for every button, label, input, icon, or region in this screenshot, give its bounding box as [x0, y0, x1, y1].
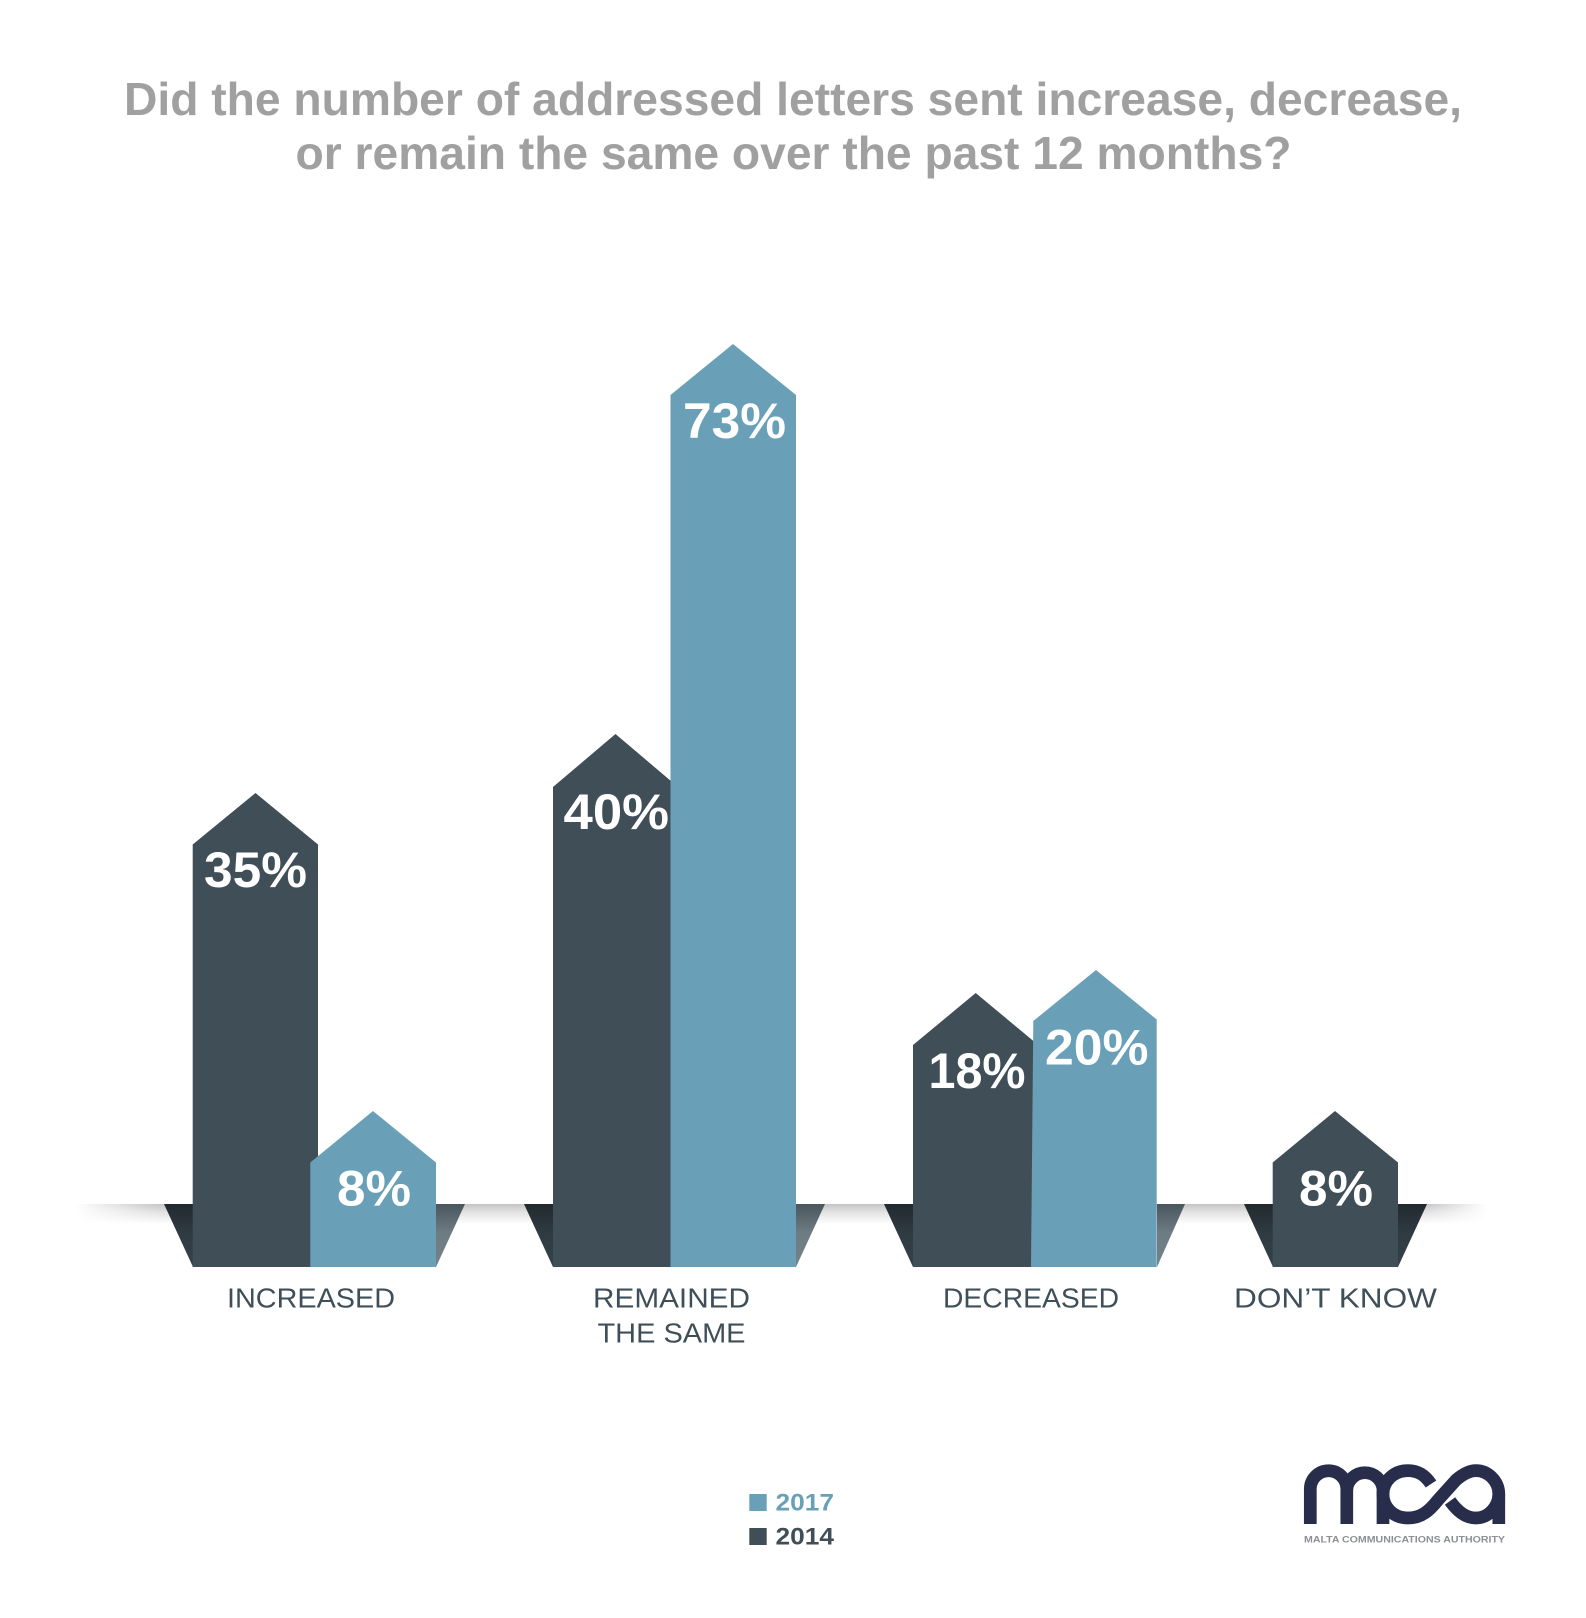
- logo: MCA: [1304, 1471, 1506, 1546]
- right flap: [1398, 1204, 1427, 1267]
- value: 35%: 35%: [204, 842, 307, 898]
- value: 18%: 18%: [928, 1043, 1026, 1099]
- label: remained the same: THE SAME: [598, 1318, 746, 1349]
- legend: [749, 1490, 835, 1551]
- bar group: remained the same: [524, 344, 825, 1349]
- bar: 2017 8%: [310, 1111, 436, 1267]
- legend label 2017: 2017: [776, 1490, 834, 1517]
- bar: 2017 73%: [670, 344, 796, 1267]
- left flap: [164, 1204, 193, 1267]
- bar: 2014 8%: [1273, 1111, 1398, 1267]
- legend label 2014: 2014: [776, 1524, 835, 1551]
- value: 73%: 73%: [683, 393, 786, 449]
- title: or remain the same over the past 12 months?: [296, 127, 1292, 179]
- label: increased: INCREASED: [227, 1283, 395, 1314]
- logo caption: MALTA COMMUNICATIONS AUTHORITY: [1304, 1535, 1506, 1546]
- bar: 2014 18%: [913, 993, 1037, 1267]
- right flap: [436, 1204, 465, 1267]
- title: [124, 73, 1462, 179]
- left flap: [524, 1204, 553, 1267]
- left flap: [884, 1204, 913, 1267]
- icon: logo mark: [1310, 1471, 1499, 1524]
- value: 8%: 8%: [1299, 1161, 1373, 1217]
- label: don't know: DON’T KNOW: [1234, 1283, 1438, 1314]
- label: remained the same: REMAINED: [593, 1283, 750, 1314]
- value: 20%: 20%: [1045, 1020, 1148, 1076]
- bar group: decreased: [884, 970, 1185, 1314]
- bar group: increased: [164, 793, 465, 1314]
- title: Did the number of addressed letters sent increase, decrease,: [124, 73, 1462, 125]
- value: 40%: 40%: [564, 784, 669, 840]
- legend swatch 2017: [749, 1494, 767, 1511]
- label: decreased: DECREASED: [943, 1283, 1119, 1314]
- bar: 2014 35%: [193, 793, 318, 1267]
- legend swatch 2014: [749, 1528, 767, 1545]
- value: 8%: 8%: [337, 1161, 411, 1217]
- left flap: [1244, 1204, 1273, 1267]
- horizon shadow: [75, 1204, 1487, 1224]
- right flap: [796, 1204, 825, 1267]
- bar group: don't know: [1234, 1111, 1438, 1314]
- bar: 2014 40%: [553, 734, 678, 1267]
- label: remained the same: [593, 1283, 750, 1349]
- bar: 2017 20%: [1031, 970, 1157, 1267]
- right flap: [1157, 1204, 1185, 1267]
